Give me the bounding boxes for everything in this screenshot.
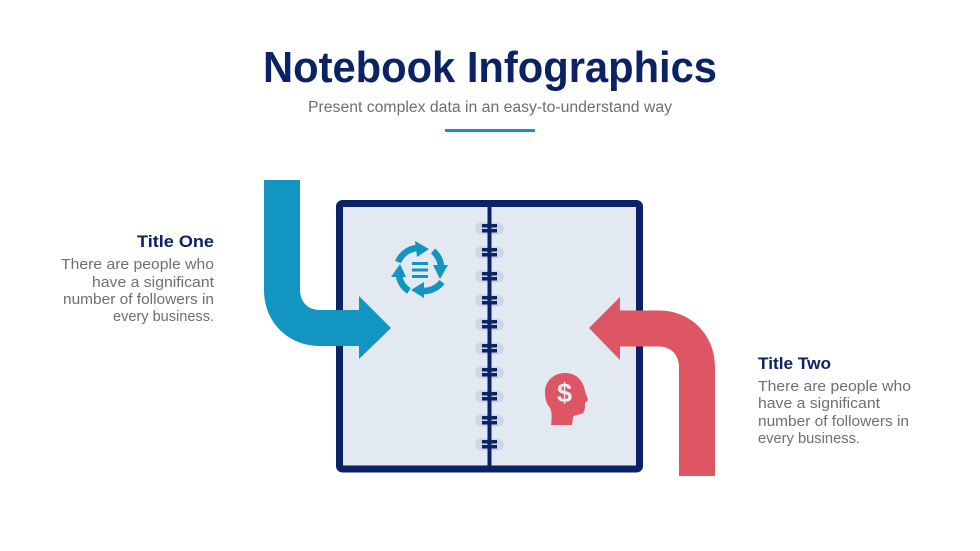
body: title one: There are people who bbox=[61, 256, 214, 273]
arrow: red bbox=[589, 297, 715, 476]
subtitle: Present complex data in an easy-to-understand way bbox=[308, 99, 672, 116]
body: title two bbox=[758, 378, 911, 447]
notebook spine bbox=[488, 206, 492, 466]
spiral rings bbox=[475, 222, 504, 450]
body: title two: have a significant bbox=[758, 395, 881, 412]
title underline bbox=[445, 129, 535, 132]
body: title two: number of followers in bbox=[758, 413, 909, 430]
arrow: blue bbox=[264, 180, 391, 359]
text block: title two bbox=[758, 354, 911, 447]
body: title one bbox=[61, 256, 215, 325]
notebook cover and page bbox=[340, 204, 640, 469]
title: Notebook Infographics bbox=[263, 43, 717, 92]
dollar sign: $ bbox=[557, 378, 572, 408]
icon: cycle arrows bbox=[391, 241, 448, 298]
body: title one: every business. bbox=[113, 308, 214, 325]
icon: head with dollar bbox=[545, 373, 588, 425]
body: title two: every business. bbox=[758, 430, 860, 447]
heading: title one: Title One bbox=[137, 232, 214, 251]
body: title two: There are people who bbox=[758, 378, 911, 395]
heading: title two: Title Two bbox=[758, 354, 831, 373]
body: title one: have a significant bbox=[92, 274, 215, 291]
body: title one: number of followers in bbox=[63, 291, 214, 308]
notebook bbox=[340, 204, 640, 469]
text block: title one bbox=[61, 232, 215, 325]
